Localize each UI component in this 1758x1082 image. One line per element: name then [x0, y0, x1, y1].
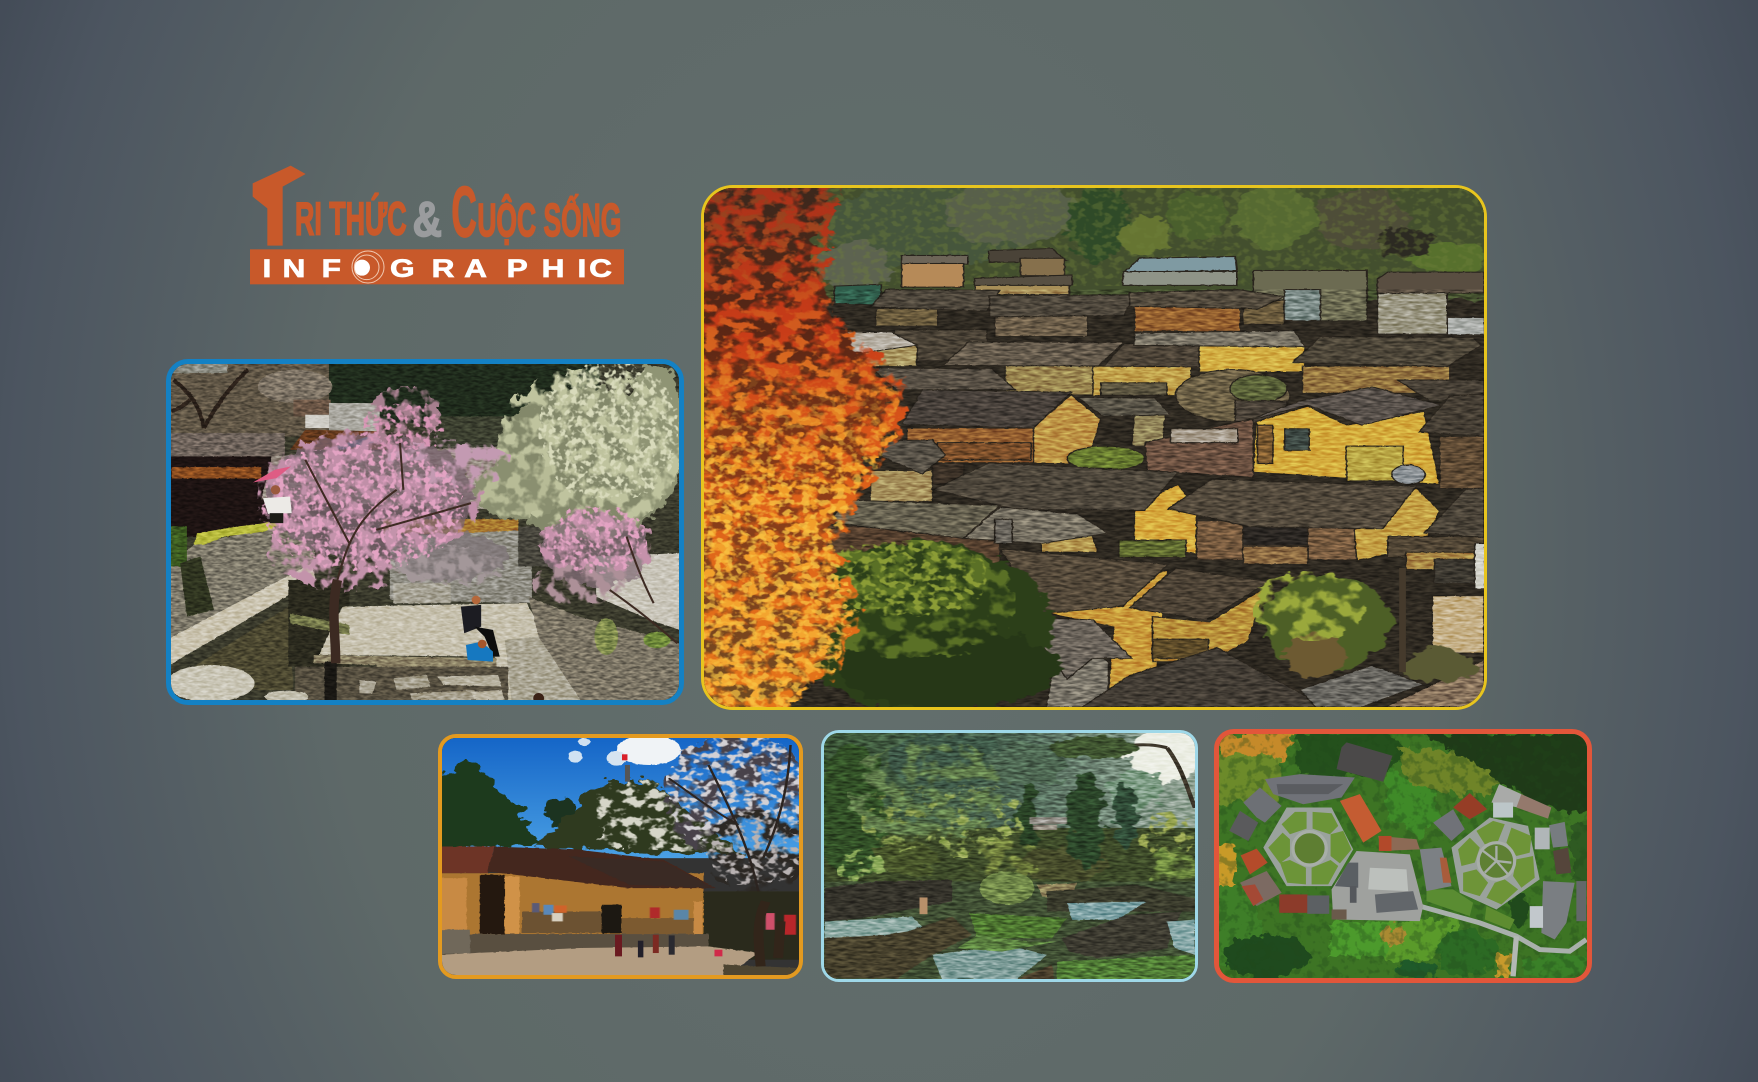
- terraced fields and forest: [1213, 732, 1593, 980]
- laundry: [532, 903, 796, 935]
- logo wordmark: &: [413, 192, 442, 247]
- green bushes: [790, 540, 1476, 712]
- logo banner: INF: [262, 255, 341, 283]
- left stone wall: [167, 518, 349, 690]
- central building: [1332, 851, 1423, 921]
- tree branches: [305, 443, 677, 643]
- surrounding buildings: [1229, 742, 1586, 940]
- photo: aerial view of octagonal school complex: [1214, 729, 1592, 983]
- main trunk: [334, 580, 337, 663]
- rocks and terraces: [817, 871, 1202, 985]
- sky glow: [1127, 728, 1207, 781]
- photo: misty forest with rocks and cabbage fields: [821, 730, 1198, 982]
- photo: earthen school under blue sky with blossoming tree: [438, 734, 803, 979]
- logo banner: GRAPHIC: [390, 255, 612, 283]
- logo wordmark: C: [451, 172, 477, 252]
- people: [253, 466, 544, 704]
- logo wordmark: RI THỨC: [295, 192, 407, 244]
- pink peach blossom tree: [258, 386, 654, 603]
- hillside foliage texture: [700, 182, 1491, 286]
- right stone wall: [528, 553, 679, 703]
- trees left and hill: [435, 758, 748, 855]
- bare blossoming tree: [664, 733, 813, 905]
- white plum tree: [474, 360, 684, 540]
- flag and tower: [622, 754, 630, 782]
- field texture: [1213, 729, 1593, 983]
- tile and wall texture: [700, 290, 1491, 710]
- hillside: [679, 168, 1507, 300]
- village houses: [705, 249, 1485, 707]
- utility pole: [1399, 568, 1406, 672]
- house: [438, 847, 716, 936]
- logo banner: [250, 249, 624, 284]
- hut: [1030, 817, 1067, 830]
- children: [615, 935, 722, 957]
- foreground branch: [1102, 745, 1195, 808]
- person: [920, 897, 928, 914]
- logo icon: stylised T: [253, 166, 306, 246]
- branch foliage: [1047, 737, 1137, 758]
- background hillside: [167, 360, 600, 450]
- grounds and road: [1420, 889, 1586, 976]
- back stone wall: [383, 519, 559, 603]
- photo: terraced yellow earthen houses with autumn tree: [701, 185, 1487, 710]
- logo: Tri Thức & Cuộc Sống Infographic: [250, 166, 624, 284]
- right octagon courtyard: [1451, 818, 1540, 909]
- courtyard: [290, 603, 583, 702]
- texture: [167, 360, 684, 707]
- tree trunk: [758, 901, 781, 966]
- forest trees: [817, 734, 1197, 888]
- rocks foreground: [167, 662, 508, 703]
- autumn tree: [674, 164, 909, 717]
- logo wordmark: [295, 172, 621, 252]
- distant houses: [290, 400, 576, 450]
- clouds: [568, 735, 681, 766]
- photo: peach and plum blossoms at a stone courtyard: [166, 359, 684, 705]
- hill blossoms: [597, 780, 738, 852]
- dark yard behind: [701, 891, 800, 960]
- steps and ground: [440, 930, 799, 978]
- dark house with tiled roof: [167, 433, 512, 537]
- texture: [817, 728, 1202, 985]
- left octagon courtyard: [1263, 808, 1353, 886]
